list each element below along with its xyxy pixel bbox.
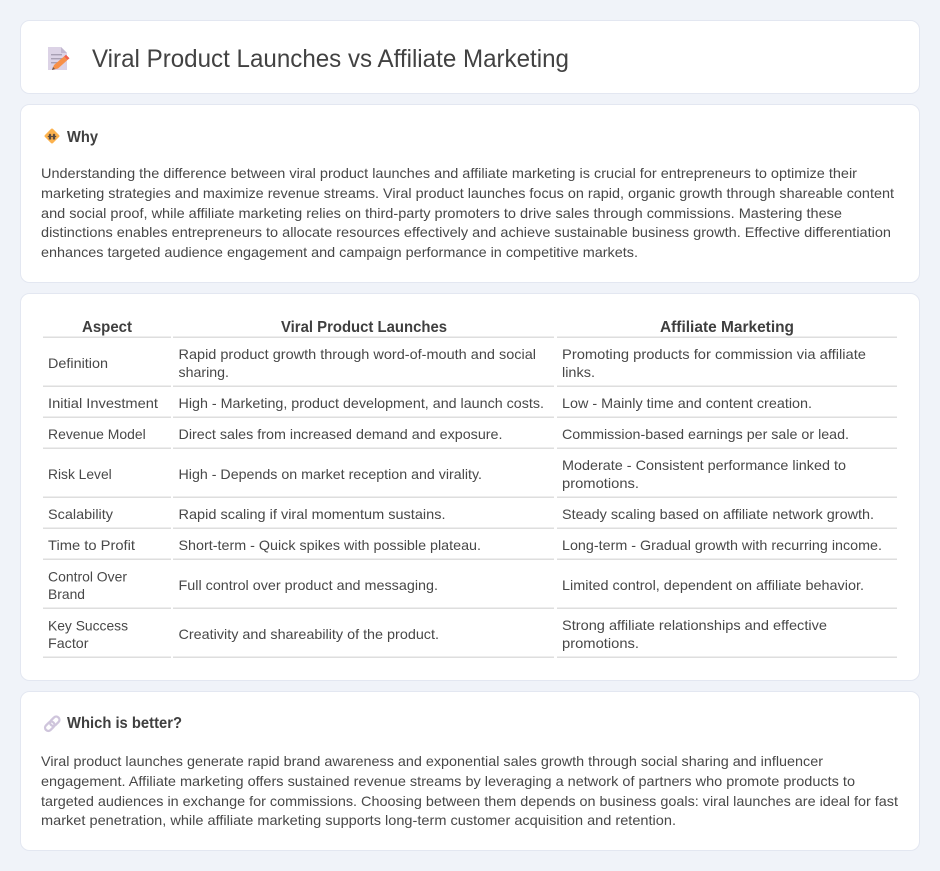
text block: why paragraph: distinctions enables entrepreneurs to allocate resources effectively and achieve sustainable business growth. Effective differentiation <box>41 224 891 240</box>
table row: time to profit: Long-term - Gradual growth with recurring income. <box>562 537 882 553</box>
table row: definition: Promoting products for commission via affiliate <box>562 346 866 362</box>
table row: initial investment <box>43 395 897 418</box>
table row: scalability: Steady scaling based on affiliate network growth. <box>562 506 874 522</box>
table row: risk level: High - Depends on market reception and virality. <box>178 466 482 482</box>
table header row: Aspect <box>82 319 133 336</box>
table row: control over brand: Full control over product and messaging. <box>178 577 438 593</box>
table row: risk level: Moderate - Consistent performance linked to <box>562 457 846 473</box>
table row: time to profit: Time to Profit <box>48 537 135 553</box>
text block: which is better paragraph <box>41 753 898 828</box>
table row: key success factor: Key Success <box>48 618 128 634</box>
table header row: Viral Product Launches <box>281 319 447 336</box>
table row: key success factor: promotions. <box>562 635 639 651</box>
text block: which is better paragraph: targeted audiences in exchange for commissions. Choosing between them depends on business goals: viral launches are ideal for fast <box>41 793 898 809</box>
table row: key success factor: Strong affiliate relationships and effective <box>562 617 827 633</box>
table row: control over brand: Control Over <box>48 568 127 584</box>
table header row: Affiliate Marketing <box>660 319 794 336</box>
heading: why: Why <box>67 129 98 146</box>
table row: revenue model: Commission-based earnings per sale or lead. <box>562 426 849 442</box>
panel: why <box>20 104 920 282</box>
table header row <box>43 319 897 338</box>
table row: control over brand: Brand <box>48 586 85 602</box>
text block: why paragraph: and social proof, while affiliate marketing relies on third-party promoters to drive sales through commissions. Mastering these <box>41 205 842 221</box>
text block: which is better paragraph: market penetration, while affiliate marketing supports long-term customer acquisition and retention. <box>41 812 676 828</box>
table row: definition: links. <box>562 364 595 380</box>
table row: definition: Rapid product growth through word-of-mouth and social <box>178 346 536 362</box>
table row: key success factor: Creativity and shareability of the product. <box>178 626 439 642</box>
title: Viral Product Launches vs Affiliate Marketing <box>92 45 569 73</box>
table row: initial investment: Initial Investment <box>48 395 158 411</box>
table row: initial investment: High - Marketing, product development, and launch costs. <box>178 395 544 411</box>
panel: header <box>20 20 920 94</box>
table row: key success factor <box>43 617 897 658</box>
table row: key success factor: Factor <box>48 635 89 651</box>
text block: which is better paragraph: engagement. Affiliate marketing offers sustained revenue streams by leveraging a network of partners who promote products to <box>41 773 855 789</box>
heading: which is better: Which is better? <box>67 715 182 732</box>
table row: scalability: Scalability <box>48 506 113 522</box>
table row: risk level <box>43 457 897 498</box>
panel: which is better <box>20 692 920 850</box>
text block: why paragraph: marketing strategies and maximize revenue streams. Viral product launches focus on rapid, organic growth through shareable content <box>41 185 894 201</box>
table row: scalability: Rapid scaling if viral momentum sustains. <box>178 506 446 522</box>
table row: time to profit: Short-term - Quick spikes with possible plateau. <box>178 537 481 553</box>
table row: control over brand <box>43 568 897 609</box>
table row: time to profit <box>43 537 897 560</box>
panel: comparison table <box>20 294 920 680</box>
table row: initial investment: Low - Mainly time and content creation. <box>562 395 812 411</box>
table row: risk level: promotions. <box>562 475 639 491</box>
icon: memo with pencil <box>48 47 70 70</box>
icon: children crossing sign <box>44 128 60 144</box>
table row: definition: sharing. <box>178 364 229 380</box>
table row: definition: Definition <box>48 355 108 371</box>
text block: why paragraph: Understanding the difference between viral product launches and affiliate marketing is crucial for entrepreneurs to optimize their <box>41 165 857 181</box>
text block: why paragraph: enhances targeted audience engagement and campaign performance in competitive markets. <box>41 244 638 260</box>
table row: scalability <box>43 506 897 529</box>
icon: link <box>44 715 61 732</box>
text block: why paragraph <box>41 165 894 260</box>
table row: definition <box>43 346 897 387</box>
table row: revenue model: Revenue Model <box>48 426 146 442</box>
table row: revenue model: Direct sales from increased demand and exposure. <box>178 426 502 442</box>
text block: which is better paragraph: Viral product launches generate rapid brand awareness and exponential sales growth through social sharing and influencer <box>41 753 823 769</box>
table row: control over brand: Limited control, dependent on affiliate behavior. <box>562 577 864 593</box>
table row: revenue model <box>43 426 897 449</box>
table row: risk level: Risk Level <box>48 466 112 482</box>
